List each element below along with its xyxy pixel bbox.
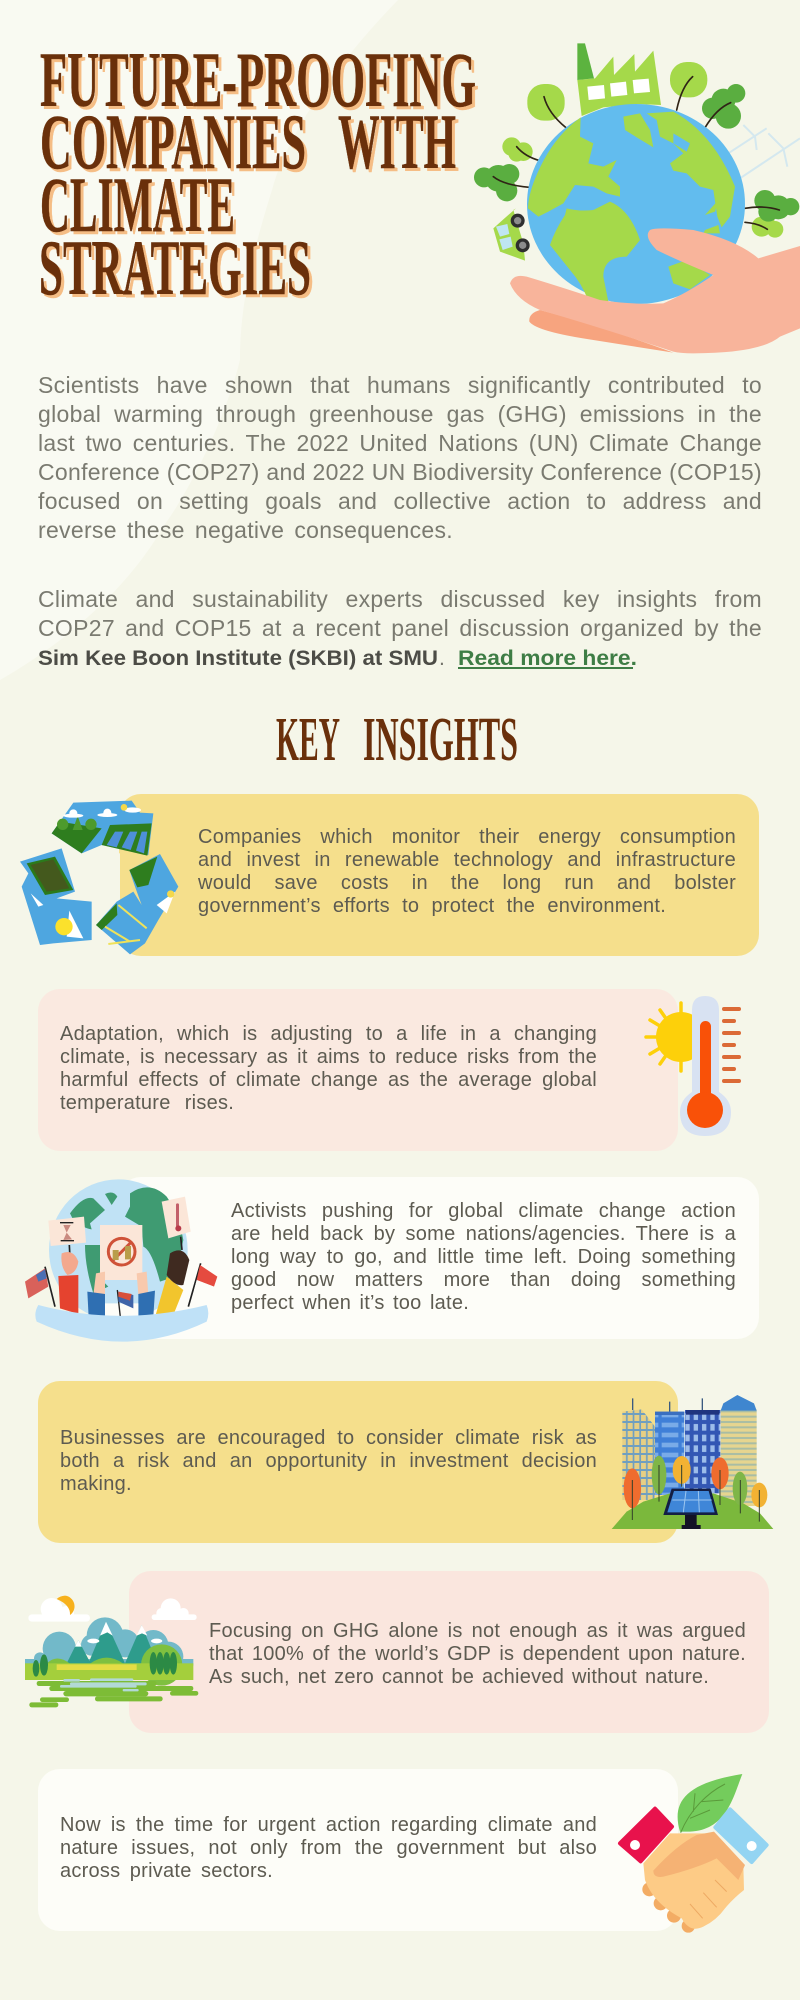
heading: key insights [276, 706, 518, 774]
insight text 6 [60, 1814, 597, 1883]
insight text 6: across private sectors. [60, 1860, 273, 1882]
panel: nature and GDP [129, 1571, 769, 1733]
intro paragraph 2 [38, 585, 762, 643]
icon: handshake with leaf [620, 1774, 767, 1933]
intro paragraph 1: last two centuries. The 2022 United Nations (UN) Climate Change [38, 430, 762, 456]
insight text 3: good now matters more than doing something [231, 1269, 736, 1291]
icon: climate activists in front of globe [25, 1179, 217, 1342]
intro paragraph 1: focused on setting goals and collective action to address and [38, 488, 762, 514]
panel: urgent action [38, 1769, 678, 1931]
intro paragraph 1: Scientists have shown that humans significantly contributed to [38, 372, 762, 398]
insight text 5: that 100% of the world’s GDP is dependent upon nature. [209, 1643, 746, 1665]
insight text 1 [198, 826, 736, 918]
heading: key insights: KEY [276, 706, 340, 774]
insight text 6: Now is the time for urgent action regarding climate and [60, 1814, 597, 1836]
panel: activists [119, 1177, 759, 1339]
insight text 4: making. [60, 1473, 132, 1495]
intro call to action line: Read more here. [458, 647, 637, 670]
title: CLIMATE [40, 161, 235, 248]
heading: key insights: INSIGHTS [363, 706, 518, 774]
panel: adaptation [38, 989, 678, 1151]
icon: recycling arrows with renewable energy scenes [20, 801, 178, 954]
intro paragraph 1 [38, 371, 762, 547]
insight text 4: both a risk and an opportunity in investment decision [60, 1450, 597, 1472]
title: STRATEGIES [39, 224, 311, 311]
icon: thermometer and sun [646, 996, 741, 1136]
intro paragraph 2: COP27 and COP15 at a recent panel discussion organized by the [38, 615, 762, 641]
panel: climate risk [38, 1381, 678, 1543]
insight text 3 [231, 1200, 736, 1315]
icon: hand holding globe with factory and trees [474, 43, 800, 353]
intro paragraph 2: Climate and sustainability experts discussed key insights from [38, 586, 762, 612]
icon: green city with solar panel [612, 1395, 773, 1529]
insight text 3: are held back by some nations/agencies. There is a [231, 1223, 736, 1245]
insight text 1: government’s efforts to protect the environment. [198, 895, 666, 917]
title: FUTURE-PROOFING [40, 36, 476, 123]
intro call to action line [38, 647, 637, 670]
panel: energy and renewable investment [119, 794, 759, 956]
insight text 3: long way to go, and little time left. Doing something [231, 1246, 736, 1268]
intro paragraph 1: Conference (COP27) and 2022 UN Biodiversity Conference (COP15) [38, 459, 762, 485]
insight text 2: climate, is necessary as it aims to reduce risks from the [60, 1046, 597, 1068]
insight text 2: Adaptation, which is adjusting to a life in a changing [60, 1023, 597, 1045]
insight text 5: Focusing on GHG alone is not enough as it was argued [209, 1620, 746, 1642]
insight text 3: perfect when it’s too late. [231, 1292, 469, 1314]
insight text 1: would save costs in the long run and bolster [198, 872, 736, 894]
icon: mountain landscape [25, 1596, 198, 1707]
title: COMPANIES [40, 98, 306, 185]
insight text 5: As such, net zero cannot be achieved without nature. [209, 1666, 709, 1688]
insight text 4: Businesses are encouraged to consider climate risk as [60, 1427, 597, 1449]
intro call to action line: . [439, 647, 445, 670]
insight text 2 [60, 1023, 597, 1115]
insight text 5 [209, 1620, 746, 1689]
insight text 1: Companies which monitor their energy consumption [198, 826, 736, 848]
insight text 1: and invest in renewable technology and infrastructure [198, 849, 736, 871]
intro call to action line: Sim Kee Boon Institute (SKBI) at SMU [38, 647, 438, 670]
insight text 3: Activists pushing for global climate change action [231, 1200, 736, 1222]
insight text 2: temperature rises. [60, 1092, 234, 1114]
title [39, 36, 476, 311]
intro paragraph 1: reverse these negative consequences. [38, 517, 453, 543]
insight text 6: nature issues, not only from the government but also [60, 1837, 597, 1859]
intro paragraph 1: global warming through greenhouse gas (GHG) emissions in the [38, 401, 762, 427]
insight text 4 [60, 1427, 597, 1496]
title: WITH [338, 98, 456, 185]
insight text 2: harmful effects of climate change as the average global [60, 1069, 597, 1091]
